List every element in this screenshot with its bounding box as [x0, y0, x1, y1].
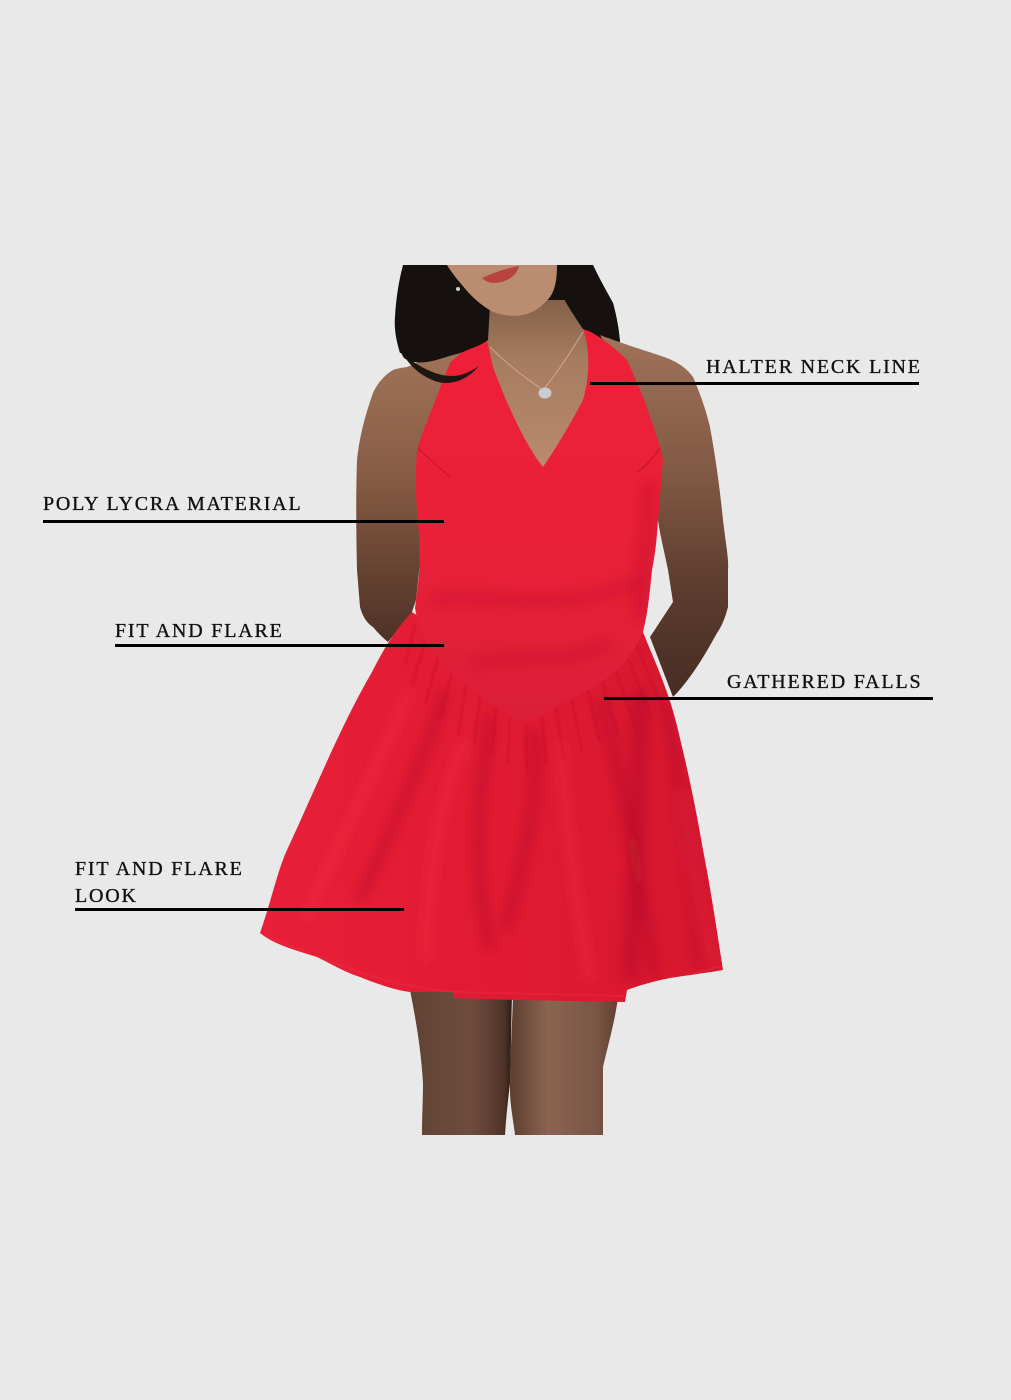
infographic canvas: [43, 265, 933, 1135]
label: halter neck line: HALTER NECK LINE: [706, 356, 922, 378]
label: fit and flare look: FIT AND FLARE: [75, 858, 244, 880]
right hair lock: [557, 265, 620, 342]
label: fit and flare look: [75, 858, 404, 911]
left arm and shoulder: [356, 345, 470, 642]
neck and chest: [483, 300, 592, 472]
hair lock over shoulder: [397, 268, 490, 362]
skirt: [260, 612, 723, 1002]
earring: [456, 287, 460, 291]
label: halter neck line: [590, 356, 922, 385]
right arm and shoulder: [600, 335, 728, 697]
necklace: [490, 332, 583, 390]
label: fit and flare: FIT AND FLARE: [115, 620, 284, 642]
label: poly lycra material: [43, 493, 444, 523]
left leg: [410, 990, 512, 1135]
skirt folds: [262, 625, 722, 996]
right leg: [510, 995, 618, 1135]
label: poly lycra material: POLY LYCRA MATERIAL: [43, 493, 302, 515]
label: fit and flare look: LOOK: [75, 885, 138, 907]
hair strands tail: [404, 356, 479, 383]
pendant: [538, 388, 552, 398]
hair behind head: [395, 265, 620, 353]
label: gathered falls: GATHERED FALLS: [727, 671, 922, 693]
label: gathered falls: [604, 671, 933, 700]
bodice shading: [418, 446, 662, 665]
face: [447, 265, 557, 316]
figure: model wearing red dress: [260, 265, 728, 1135]
bodice: [415, 328, 663, 723]
lips: [482, 266, 519, 283]
label: fit and flare: [115, 620, 444, 647]
